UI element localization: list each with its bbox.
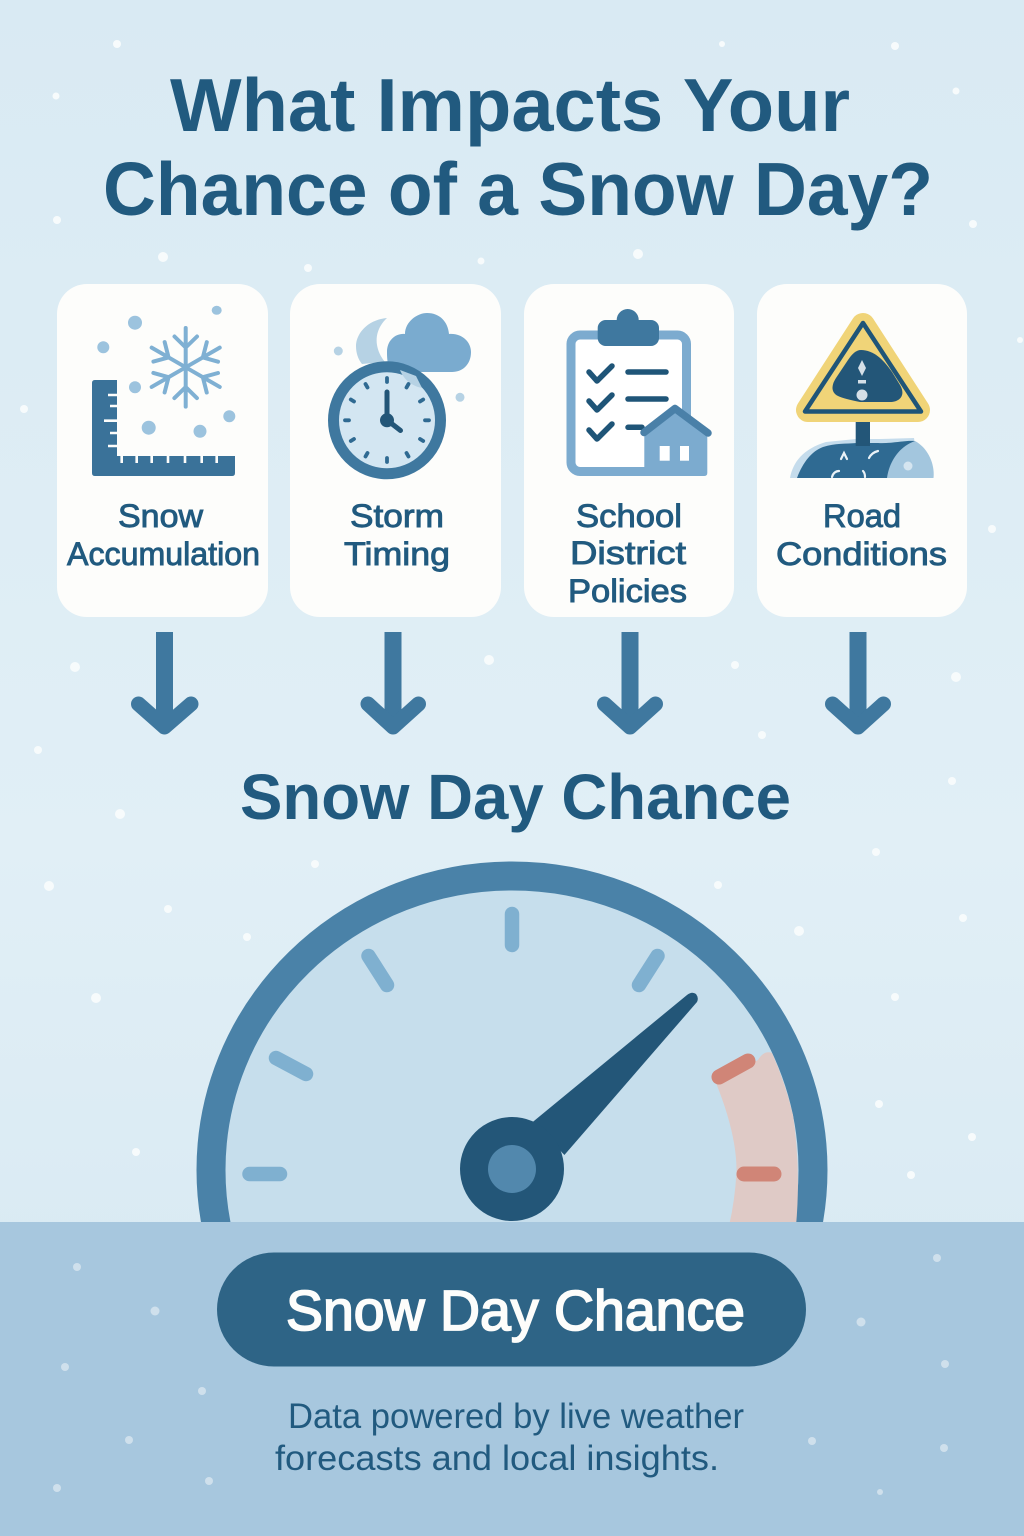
label <box>344 498 450 572</box>
title: Chance of a Snow Day? <box>103 147 933 231</box>
arrow 4 <box>832 632 884 727</box>
footer text: forecasts and local insights. <box>275 1439 719 1478</box>
gauge <box>211 876 813 1464</box>
label: Road <box>823 498 901 534</box>
label <box>568 498 687 609</box>
bottom band <box>0 1222 1024 1536</box>
panel: school district policies <box>524 284 734 617</box>
gauge ticks <box>250 914 658 1174</box>
icon: clock, moon and cloud <box>334 313 471 474</box>
needle <box>460 993 698 1221</box>
gauge red ticks <box>719 1061 774 1174</box>
heading: snow day chance: Snow Day Chance <box>240 761 791 833</box>
label: Timing <box>344 536 450 572</box>
panel: road conditions <box>757 284 967 617</box>
label: School <box>576 498 682 534</box>
icon: warning sign and snowy road <box>790 323 934 478</box>
icon: clipboard and house <box>571 309 708 476</box>
arrow 1 <box>138 632 191 727</box>
label: Conditions <box>776 536 947 572</box>
label: Accumulation <box>67 536 260 572</box>
button: snow day chance <box>217 1252 806 1366</box>
icon: snowflake and ruler <box>92 306 235 476</box>
panel: snow accumulation <box>57 284 268 617</box>
gauge red zone <box>716 1052 798 1226</box>
arrow 2 <box>368 632 418 727</box>
label: Storm <box>350 498 444 534</box>
footer text <box>275 1397 744 1478</box>
label: Policies <box>568 573 687 609</box>
footer text: Data powered by live weather <box>288 1397 744 1436</box>
title: What Impacts Your <box>170 63 850 147</box>
button: snow day chance: Snow Day Chance <box>286 1279 745 1343</box>
arrow 3 <box>604 632 656 727</box>
label: District <box>570 535 686 571</box>
label <box>776 498 947 572</box>
panel: storm timing <box>290 284 501 617</box>
label: Snow <box>118 498 204 534</box>
label <box>67 498 260 572</box>
title <box>103 63 933 231</box>
